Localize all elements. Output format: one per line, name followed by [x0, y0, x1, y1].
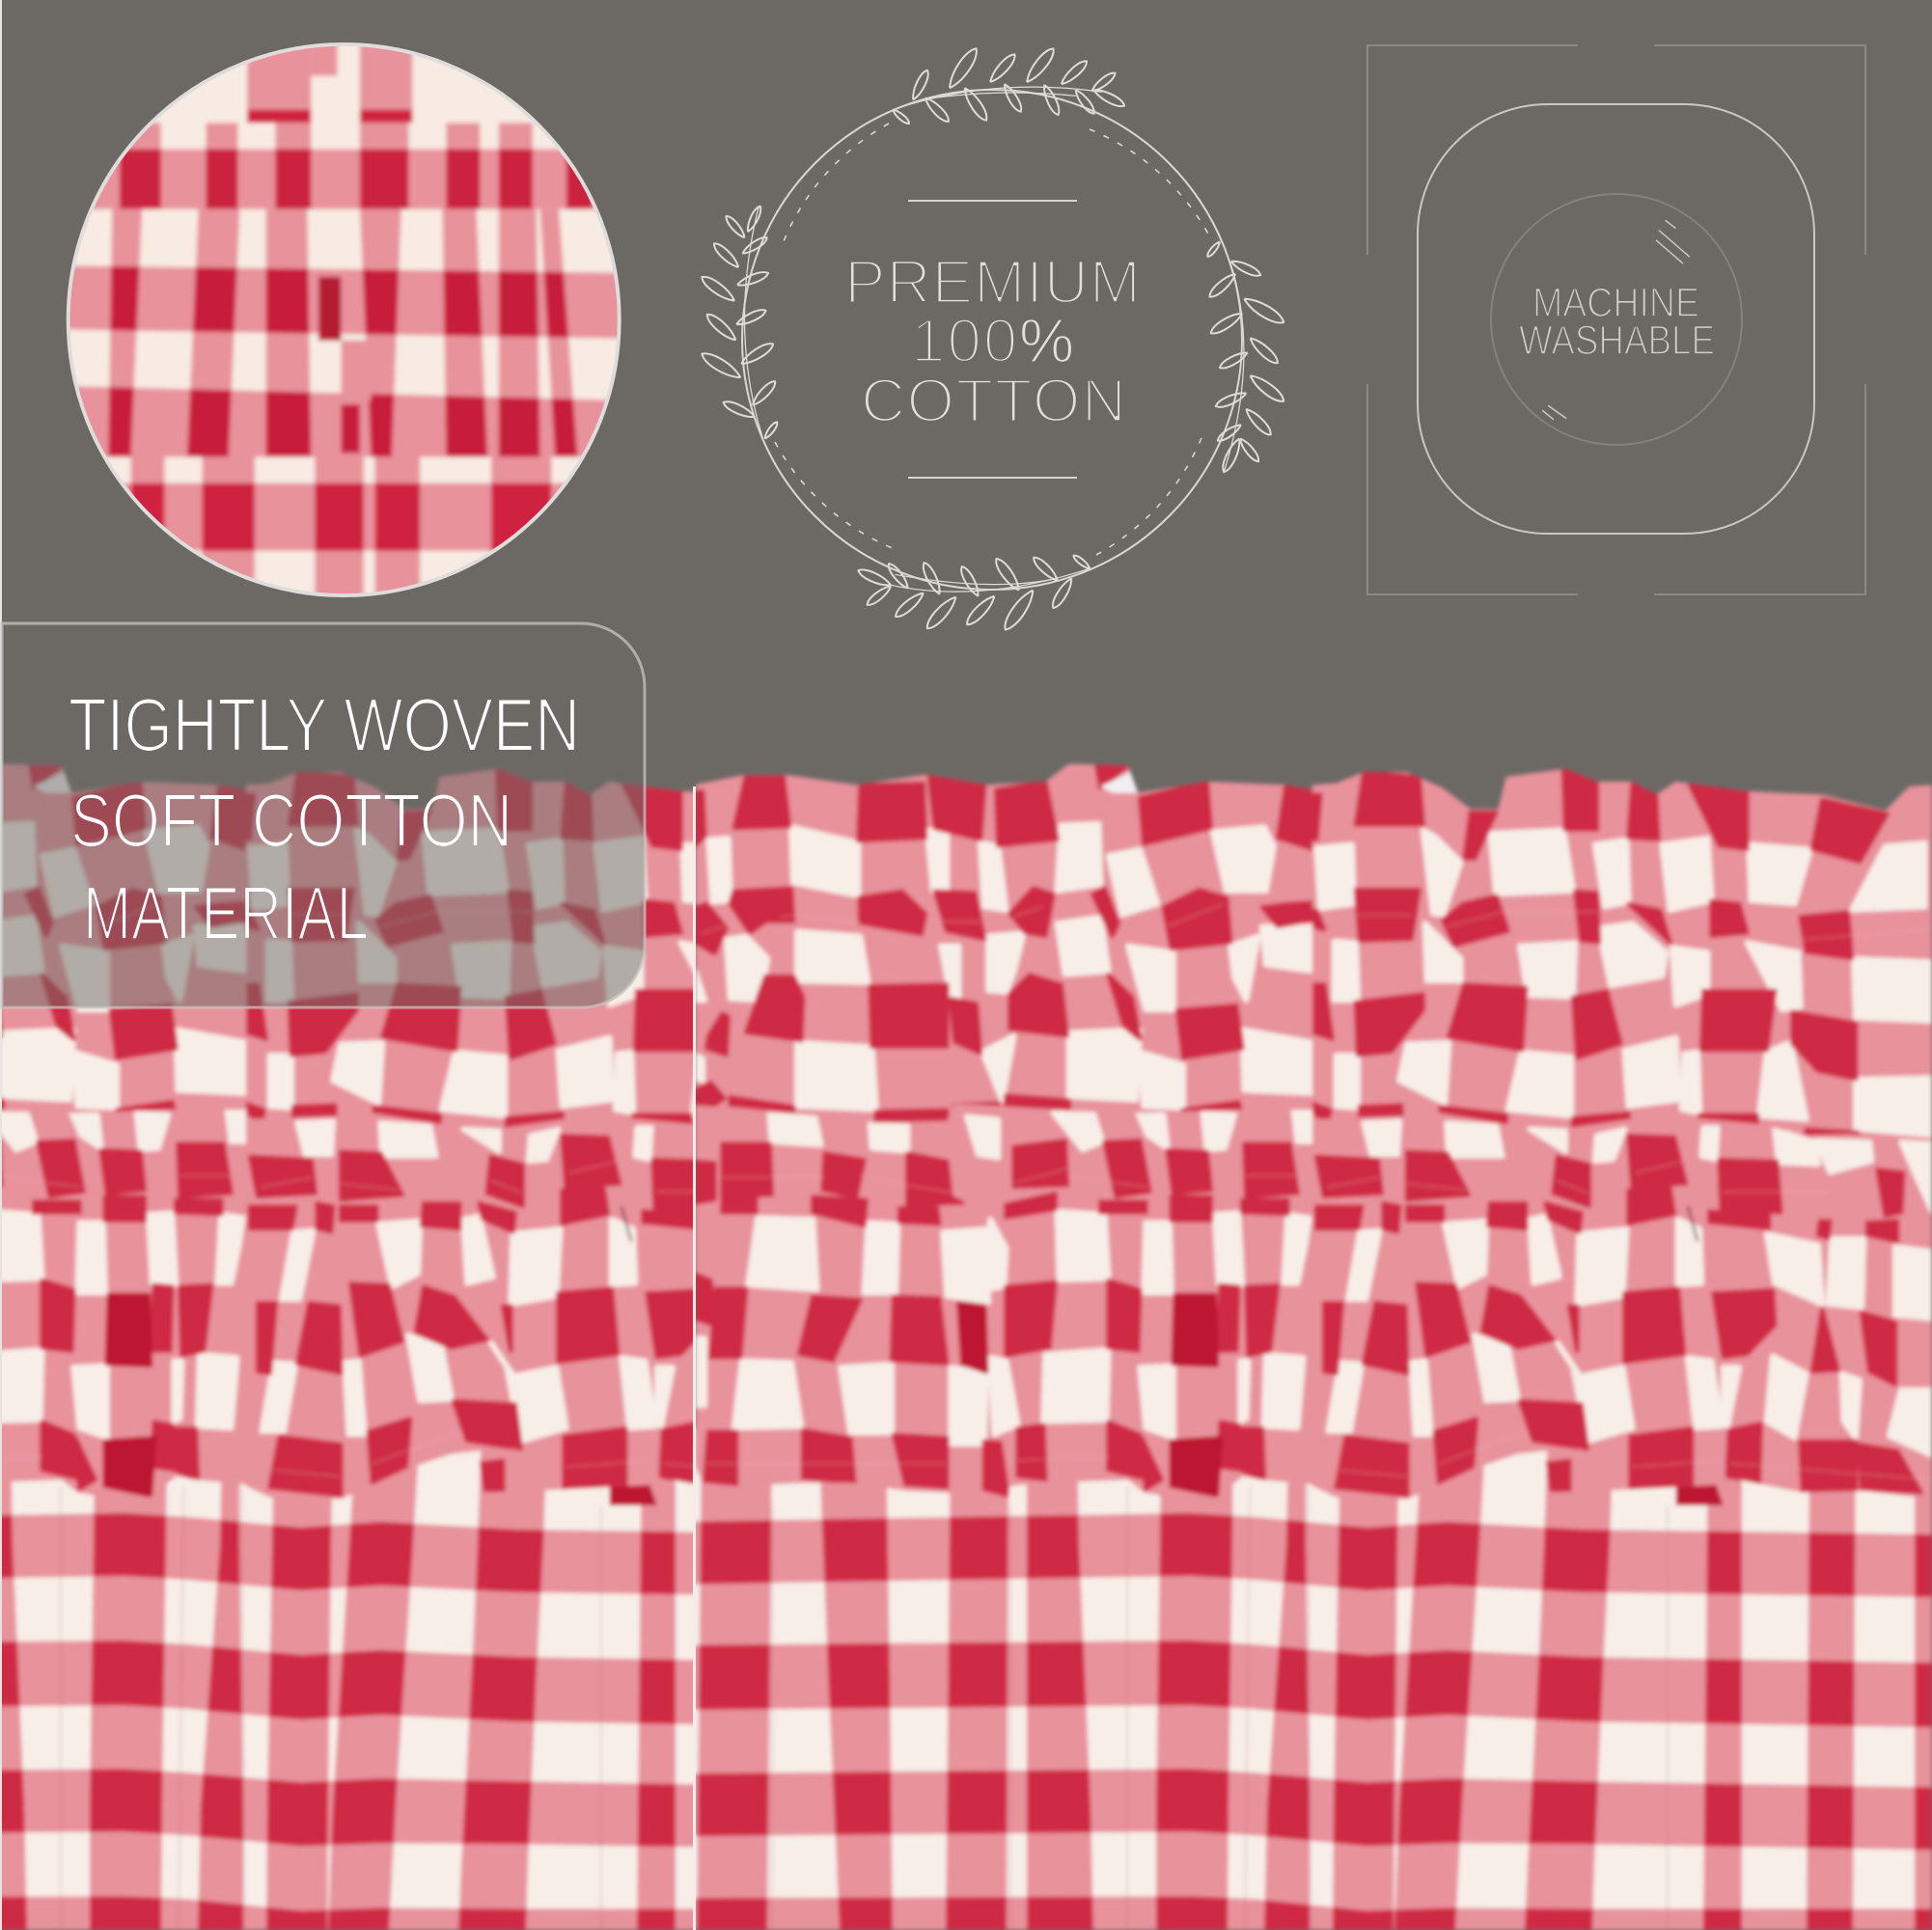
- badge text: PREMIUM: [844, 247, 1141, 317]
- wreath solid ring: [742, 90, 1242, 590]
- badge text: [844, 247, 1141, 435]
- panel: curtain photo right: [676, 753, 1932, 1930]
- panel: curtain photo left: [2, 762, 693, 1930]
- callout text: SOFT COTTON: [70, 778, 512, 863]
- badge: machine washable: [1367, 45, 1865, 594]
- callout text: [69, 682, 580, 955]
- wreath leaves: [627, 47, 1814, 649]
- machine washable text: WASHABLE: [1519, 317, 1715, 364]
- machine washable text: [1519, 280, 1715, 364]
- badge text: COTTON: [861, 366, 1126, 435]
- drum glare marks: [1542, 220, 1690, 421]
- left edge strip: [0, 0, 2, 1930]
- divider between curtain panels: [693, 786, 696, 1930]
- badge: premium cotton wreath: [699, 45, 1287, 633]
- outer corner frame: [1367, 45, 1865, 594]
- rounded square washer outline: [1418, 104, 1814, 534]
- callout text: TIGHTLY WOVEN: [69, 682, 580, 767]
- callout: tightly woven panel: [2, 623, 645, 1007]
- machine washable text: MACHINE: [1532, 280, 1699, 326]
- badge text: 100%: [911, 306, 1074, 375]
- wreath dotted arcs: [775, 124, 1210, 555]
- callout text: MATERIAL: [83, 870, 369, 955]
- badge rule top: [908, 200, 1077, 202]
- badge rule bottom: [908, 477, 1077, 479]
- inset circle: fabric close-up: [66, 42, 621, 597]
- inner drum circle: [1491, 194, 1742, 445]
